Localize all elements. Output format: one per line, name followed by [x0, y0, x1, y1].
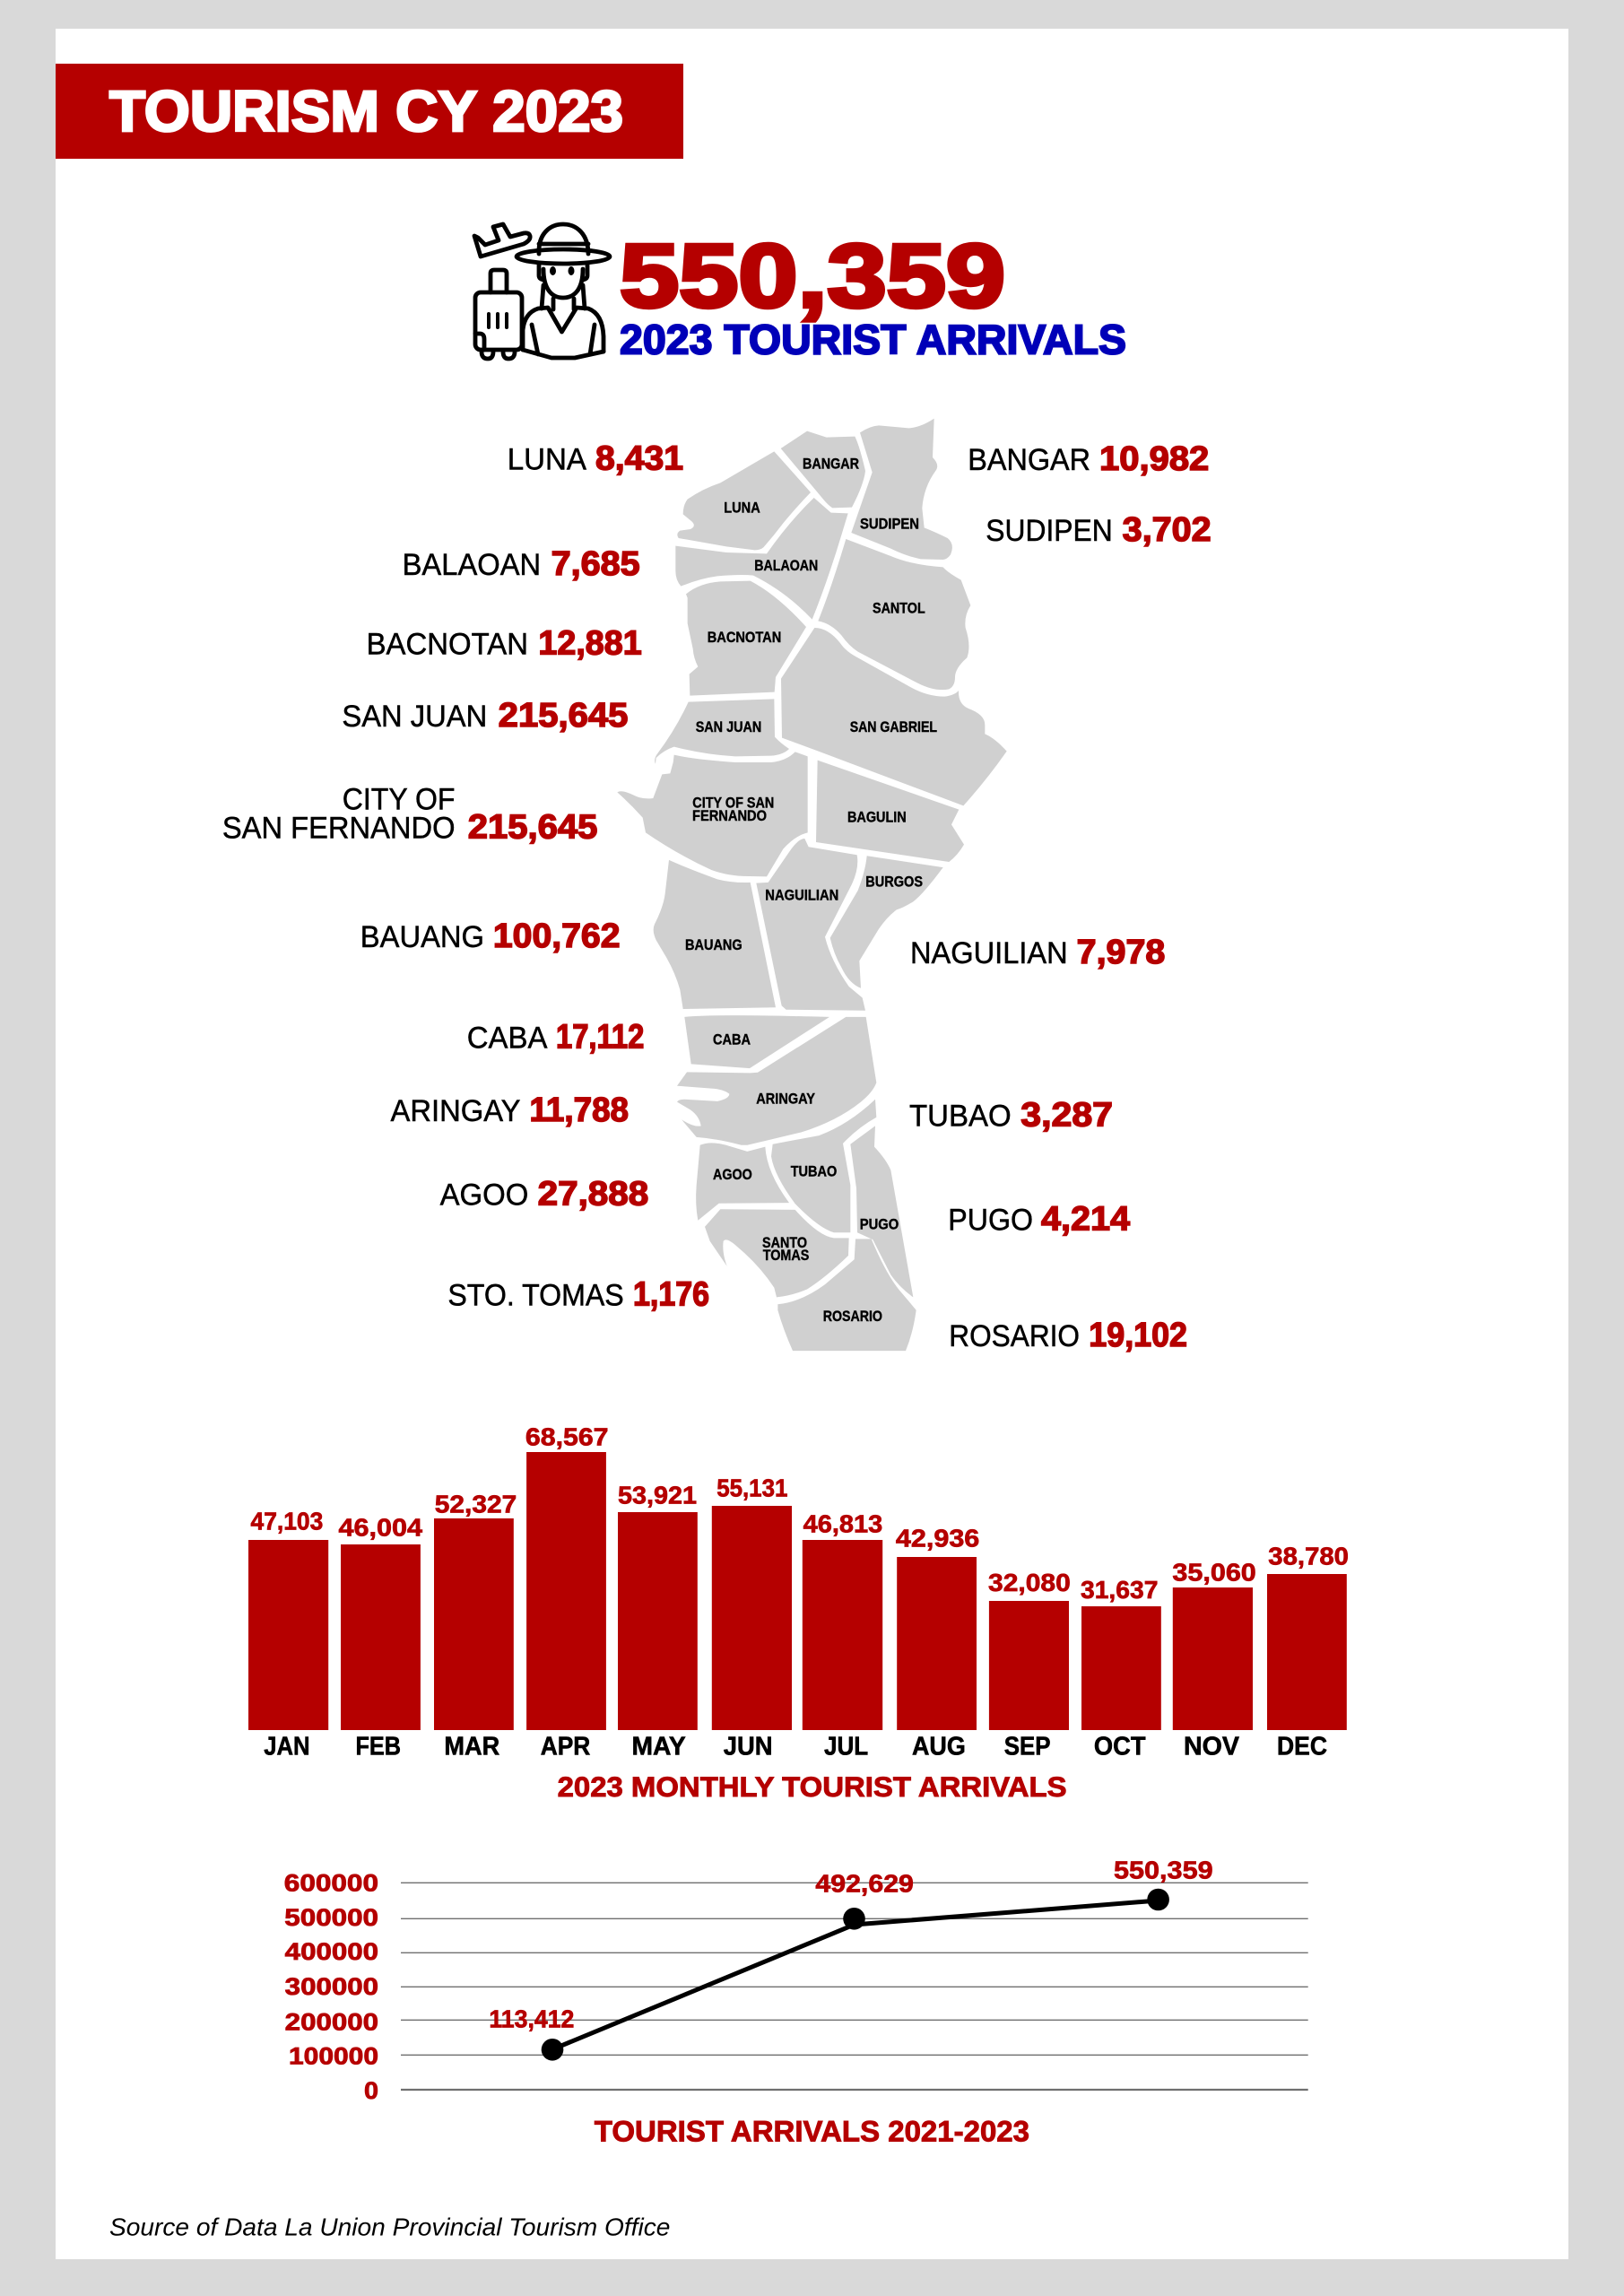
- y axis labels: [284, 1869, 378, 2104]
- map municipality names: AGOO: [713, 1167, 752, 1183]
- map municipality names: ROSARIO: [823, 1309, 882, 1325]
- Tubao arrivals: TUBAO: [909, 1100, 1012, 1134]
- Pugo shape: [850, 1126, 913, 1297]
- bar values: 42,936: [896, 1525, 979, 1552]
- Bauang arrivals: [360, 918, 621, 955]
- City of San Fernando arrivals: CITY OF: [343, 782, 456, 816]
- month labels: SEP: [1004, 1733, 1051, 1761]
- map municipality names: SANTOL: [873, 600, 925, 616]
- Naguilian arrivals: 7,978: [1077, 934, 1165, 971]
- Aringay arrivals: 11,788: [529, 1091, 629, 1129]
- Luna arrivals: 8,431: [595, 439, 683, 477]
- Bagulin shape: [816, 761, 964, 862]
- y axis labels: 500000: [284, 1904, 378, 1931]
- bar values: 68,567: [525, 1423, 608, 1451]
- month labels: MAY: [631, 1733, 686, 1761]
- Bauang shape: [654, 860, 776, 1009]
- Sudipen arrivals: SUDIPEN: [986, 514, 1113, 548]
- Santol shape: [818, 539, 970, 690]
- y axis labels: 100000: [289, 2043, 378, 2070]
- line chart: arrivals 2021-2023: [284, 1857, 1308, 2104]
- Aringay arrivals: [391, 1091, 629, 1129]
- Naguilian arrivals: NAGUILIAN: [910, 936, 1068, 970]
- Burgos shape: [830, 856, 943, 988]
- map municipality names: PUGO: [860, 1217, 899, 1233]
- Agoo arrivals: [440, 1175, 648, 1213]
- month labels: JUN: [724, 1733, 773, 1761]
- Bacnotan arrivals: [367, 624, 642, 662]
- Bangar arrivals: BANGAR: [968, 443, 1090, 477]
- bar chart: monthly arrivals: [248, 1423, 1349, 1761]
- map municipality names: BAGULIN: [847, 810, 907, 826]
- month labels: FEB: [355, 1733, 401, 1761]
- City of San Fernando arrivals: 215,645: [468, 808, 597, 846]
- Tubao arrivals: 3,287: [1020, 1097, 1113, 1135]
- Naguilian arrivals: [910, 934, 1165, 971]
- map municipality names: TOMAS: [763, 1248, 809, 1264]
- Bangar arrivals: 10,982: [1099, 440, 1209, 478]
- bar values: 46,813: [803, 1510, 882, 1538]
- municipalities north: [617, 419, 1007, 876]
- Luna arrivals: LUNA: [508, 442, 586, 476]
- Sto. Tomas arrivals: [447, 1276, 709, 1314]
- Santo Tomas shape: [705, 1209, 849, 1297]
- Agoo shape: [696, 1143, 789, 1221]
- Naguilian shape: [756, 839, 865, 1011]
- Sudipen arrivals: 3,702: [1123, 511, 1211, 549]
- icon: tourist with suitcase and plane: [474, 224, 610, 359]
- map municipality names: [685, 456, 937, 1325]
- map municipality names: BALAOAN: [754, 558, 818, 574]
- map municipality names: LUNA: [724, 500, 760, 517]
- bars: [248, 1452, 1347, 1730]
- Tubao shape: [771, 1100, 876, 1232]
- map municipality names: FERNANDO: [692, 808, 767, 824]
- Bauang arrivals: BAUANG: [360, 920, 484, 954]
- month labels: MAR: [444, 1733, 499, 1761]
- y axis labels: 0: [364, 2077, 378, 2104]
- Rosario arrivals: [949, 1317, 1187, 1354]
- map municipality names: NAGUILIAN: [765, 888, 838, 904]
- Rosario shape: [777, 1239, 916, 1351]
- map municipality names: BANGAR: [803, 456, 859, 472]
- y axis labels: 300000: [285, 1973, 378, 2000]
- y axis labels: 400000: [285, 1938, 378, 1965]
- Caba arrivals: [467, 1018, 644, 1056]
- data labels: 113,412: [489, 2005, 574, 2033]
- Tubao arrivals: [909, 1097, 1113, 1135]
- bar values: 38,780: [1268, 1543, 1349, 1570]
- Sto. Tomas arrivals: STO. TOMAS: [447, 1279, 624, 1313]
- headline subtitle: 2023 TOURIST ARRIVALS: [620, 316, 1126, 362]
- data labels: [489, 1857, 1213, 2033]
- Bangar arrivals: [968, 440, 1209, 478]
- month labels: JAN: [264, 1733, 310, 1761]
- arrivals labels, left column: [222, 439, 709, 1314]
- map: La Union municipalities: [617, 419, 1007, 1351]
- Sto. Tomas arrivals: 1,176: [633, 1276, 709, 1314]
- Pugo arrivals: [948, 1200, 1130, 1238]
- headline total: 550,359: [620, 226, 1005, 326]
- City of San Fernando arrivals: SAN FERNANDO: [222, 811, 456, 845]
- City of San Fernando shape: [617, 752, 808, 876]
- Bacnotan arrivals: 12,881: [538, 624, 642, 662]
- Balaoan arrivals: [403, 545, 640, 583]
- Rosario arrivals: 19,102: [1089, 1317, 1187, 1354]
- Bacnotan shape: [686, 581, 806, 696]
- Sudipen shape: [851, 419, 952, 560]
- month labels: AUG: [912, 1733, 966, 1761]
- bar values: 32,080: [988, 1569, 1071, 1596]
- map municipality names: BURGOS: [865, 874, 923, 891]
- y axis labels: 200000: [285, 2008, 378, 2035]
- Aringay arrivals: ARINGAY: [391, 1094, 520, 1128]
- month labels: DEC: [1277, 1733, 1327, 1761]
- arrivals labels, right column: [909, 440, 1211, 1354]
- Sudipen arrivals: [986, 511, 1211, 549]
- Pugo arrivals: 4,214: [1041, 1200, 1130, 1238]
- bar values: 53,921: [618, 1482, 697, 1509]
- Caba arrivals: 17,112: [556, 1018, 644, 1056]
- Luna shape: [677, 451, 811, 550]
- Bauang arrivals: 100,762: [493, 918, 621, 955]
- trend line: [552, 1900, 1159, 2049]
- bar values: 55,131: [716, 1474, 787, 1502]
- map municipality names: ARINGAY: [756, 1091, 815, 1107]
- map municipality names: BAUANG: [685, 937, 743, 953]
- line chart title: TOURIST ARRIVALS 2021-2023: [595, 2115, 1029, 2147]
- source note: Source of Data La Union Provincial Tourism Office: [109, 2213, 670, 2240]
- Aringay shape: [677, 1017, 876, 1145]
- y axis labels: 600000: [284, 1869, 378, 1896]
- month labels: OCT: [1094, 1733, 1146, 1761]
- month labels: [264, 1733, 1327, 1761]
- bar chart title: 2023 MONTHLY TOURIST ARRIVALS: [558, 1770, 1067, 1803]
- data points: [542, 1889, 1169, 2061]
- map municipality names: SANTO: [762, 1235, 807, 1251]
- Pugo arrivals: PUGO: [948, 1203, 1033, 1237]
- map municipality names: SAN JUAN: [696, 719, 761, 735]
- bar values: [251, 1423, 1349, 1604]
- map municipality names: CABA: [713, 1031, 751, 1048]
- Caba arrivals: CABA: [467, 1021, 548, 1055]
- map municipality names: SUDIPEN: [860, 516, 919, 532]
- bar values: 35,060: [1172, 1559, 1256, 1587]
- San Gabriel shape: [781, 628, 1007, 805]
- month labels: JUL: [824, 1733, 868, 1761]
- Balaoan shape: [675, 498, 848, 620]
- San Juan arrivals: 215,645: [499, 697, 628, 735]
- month labels: NOV: [1184, 1733, 1240, 1761]
- map municipality names: TUBAO: [791, 1163, 837, 1179]
- San Juan shape: [655, 699, 789, 764]
- Luna arrivals: [508, 439, 683, 477]
- bar values: 46,004: [339, 1514, 422, 1542]
- bar values: 52,327: [435, 1491, 517, 1518]
- map municipality names: CITY OF SAN: [692, 796, 774, 812]
- Bacnotan arrivals: BACNOTAN: [367, 627, 528, 661]
- map municipality names: SAN GABRIEL: [850, 719, 937, 735]
- month labels: APR: [541, 1733, 590, 1761]
- Caba shape: [684, 1015, 829, 1068]
- data labels: 492,629: [815, 1869, 914, 1897]
- Agoo arrivals: 27,888: [538, 1175, 648, 1213]
- title banner: [56, 64, 683, 159]
- Agoo arrivals: AGOO: [440, 1178, 528, 1212]
- City of San Fernando arrivals: [222, 782, 597, 846]
- Rosario arrivals: ROSARIO: [949, 1319, 1080, 1353]
- title banner: TOURISM CY 2023: [109, 79, 623, 144]
- San Juan arrivals: SAN JUAN: [342, 700, 487, 734]
- bar values: 31,637: [1081, 1576, 1158, 1604]
- map municipality names: BACNOTAN: [708, 630, 781, 646]
- Balaoan arrivals: 7,685: [551, 545, 640, 583]
- Bangar shape: [781, 431, 865, 508]
- Balaoan arrivals: BALAOAN: [403, 548, 541, 582]
- municipalities south: [654, 839, 943, 1351]
- San Juan arrivals: [342, 697, 628, 735]
- data labels: 550,359: [1114, 1857, 1213, 1884]
- bar values: 47,103: [251, 1508, 323, 1535]
